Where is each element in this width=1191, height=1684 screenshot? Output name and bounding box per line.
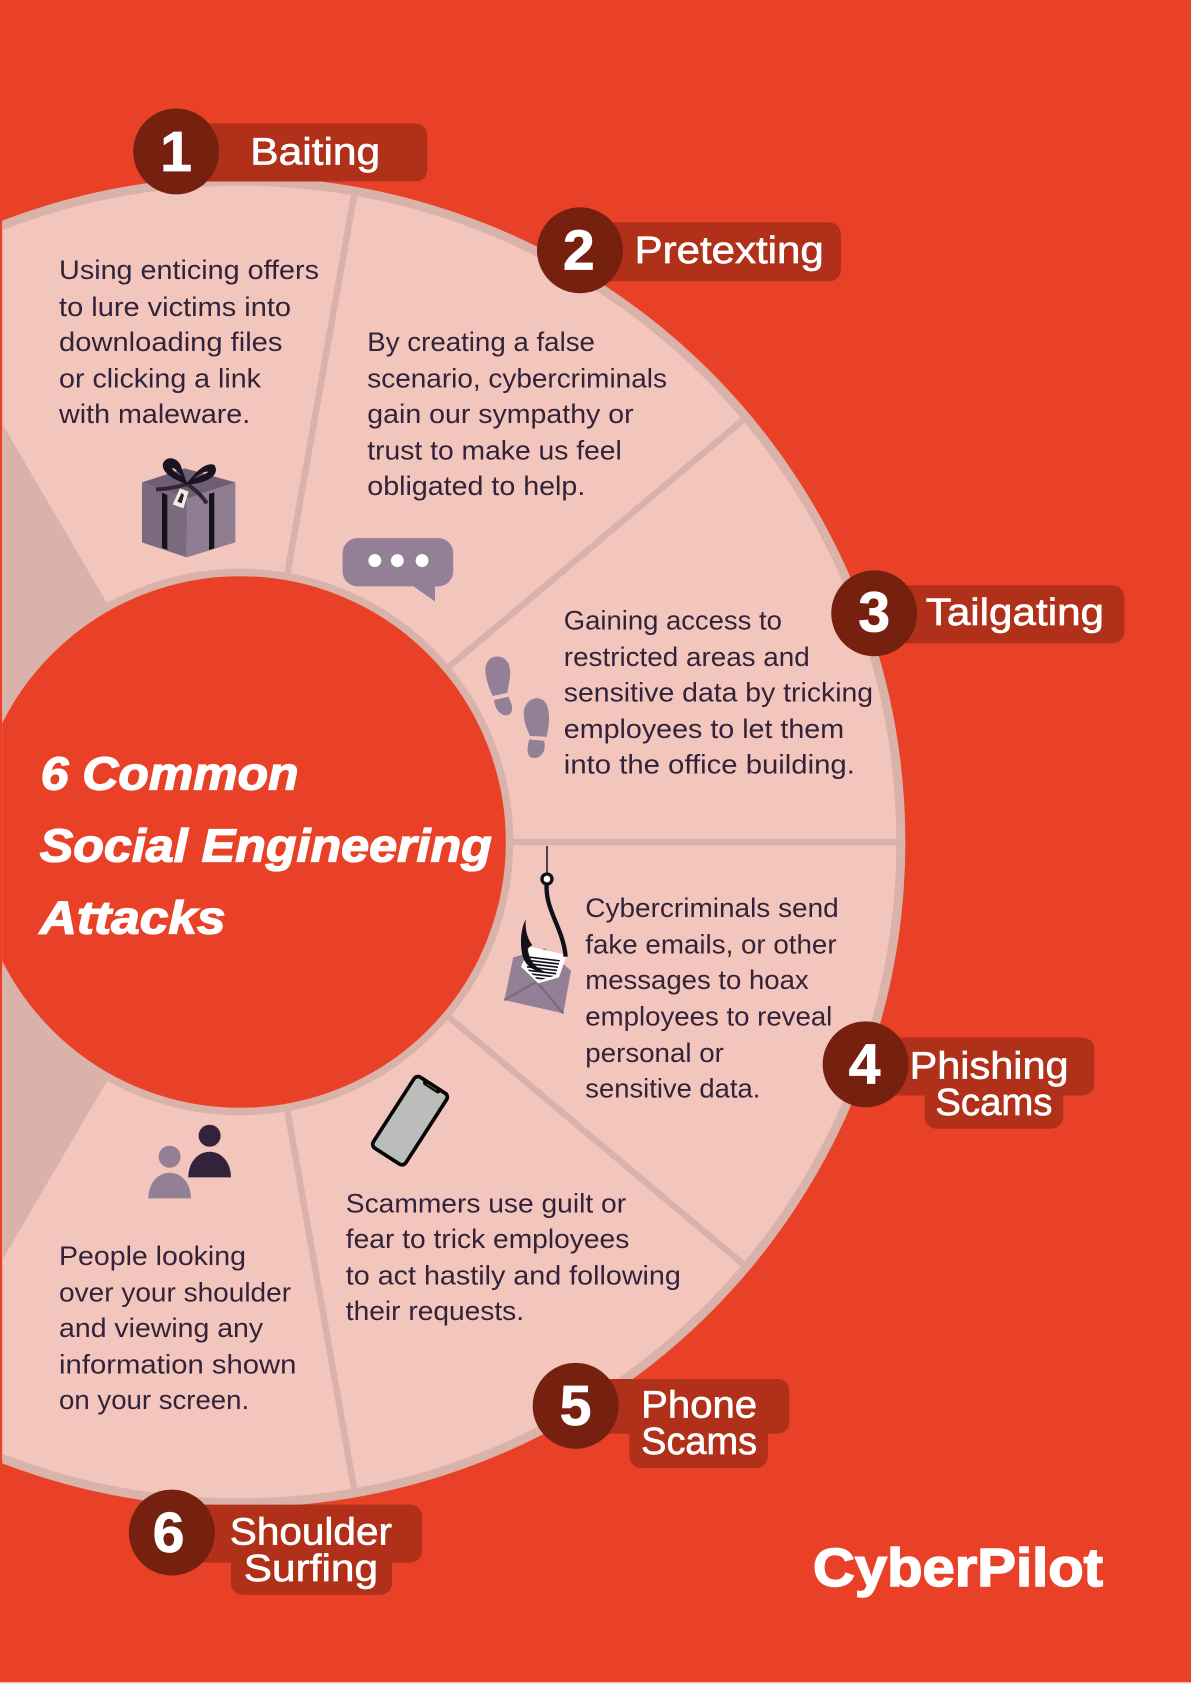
- text: pretexting description: trust to make us feel: [367, 436, 622, 466]
- text: baiting description: with maleware.: [58, 399, 250, 429]
- label 6: Shoulder Surfing: [129, 1490, 422, 1595]
- label 4: Phishing Scams: Scams: [935, 1081, 1052, 1123]
- text: shoulder surfing description: on your screen.: [59, 1385, 249, 1415]
- text: shoulder surfing description: [59, 1241, 296, 1415]
- text: phishing description: sensitive data.: [585, 1074, 760, 1104]
- text: shoulder surfing description: and viewing any: [59, 1313, 264, 1343]
- text: phone scams description: [346, 1189, 681, 1326]
- text: phishing description: Cybercriminals send: [585, 893, 839, 923]
- text: phishing description: messages to hoax: [585, 965, 809, 995]
- text: phishing description: fake emails, or other: [585, 930, 837, 960]
- text: pretexting description: gain our sympathy or: [367, 399, 634, 429]
- wheel with six segments: [0, 181, 901, 1503]
- label 3: Tailgating: [831, 570, 1124, 656]
- title: 6 Common: [41, 747, 299, 799]
- text: baiting description: downloading files: [59, 327, 282, 357]
- label 1: Baiting: 1: [160, 120, 192, 184]
- label 1: Baiting: Baiting: [250, 130, 380, 172]
- label 1: Baiting: [133, 108, 427, 194]
- icon: footprints: [485, 656, 549, 758]
- label 5: Phone Scams: [533, 1363, 789, 1468]
- label 4: Phishing Scams: [823, 1021, 1094, 1129]
- label 2: Pretexting: 2: [563, 219, 595, 283]
- icon: phishing hook and envelope: [504, 846, 571, 1013]
- label 5: Phone Scams: 5: [560, 1374, 591, 1438]
- text: phishing description: [585, 893, 839, 1104]
- label 2: Pretexting: Pretexting: [635, 229, 824, 271]
- title: [39, 747, 492, 943]
- label 3: Tailgating: 3: [858, 581, 890, 645]
- title: Social Engineering: [40, 819, 492, 871]
- text: tailgating description: restricted areas and: [564, 642, 810, 672]
- text: tailgating description: Gaining access to: [564, 605, 782, 635]
- text: phishing description: personal or: [585, 1038, 724, 1068]
- text: pretexting description: [367, 327, 667, 501]
- label 2: Pretexting: [537, 207, 841, 293]
- text: baiting description: Using enticing offers: [59, 255, 319, 285]
- label 6: Shoulder Surfing: Shoulder: [230, 1510, 392, 1552]
- text: baiting description: to lure victims into: [59, 292, 291, 322]
- text: pretexting description: obligated to help.: [367, 471, 585, 501]
- label 4: Phishing Scams: 4: [849, 1033, 881, 1097]
- label 6: Shoulder Surfing: 6: [153, 1501, 184, 1565]
- icon: gift box: [142, 459, 235, 557]
- icon: smartphone: [371, 1075, 449, 1167]
- text: pretexting description: scenario, cybercriminals: [367, 364, 667, 394]
- text: phone scams description: their requests.: [346, 1296, 524, 1326]
- label 6: Shoulder Surfing: Surfing: [244, 1547, 378, 1589]
- text: baiting description: or clicking a link: [59, 364, 262, 394]
- text: tailgating description: employees to let them: [564, 714, 844, 744]
- text: tailgating description: [564, 605, 873, 779]
- text: phone scams description: to act hastily and following: [346, 1260, 681, 1290]
- text: phishing description: employees to reveal: [585, 1002, 832, 1032]
- text: shoulder surfing description: People looking: [59, 1241, 246, 1271]
- text: shoulder surfing description: information shown: [59, 1350, 296, 1380]
- text: tailgating description: sensitive data by tricking: [564, 677, 873, 707]
- label 5: Phone Scams: Phone: [641, 1384, 757, 1426]
- text: phone scams description: Scammers use guilt or: [346, 1189, 626, 1219]
- text: tailgating description: into the office building.: [564, 749, 855, 779]
- text: pretexting description: By creating a false: [367, 327, 595, 357]
- label 5: Phone Scams: Scams: [641, 1420, 757, 1462]
- text: baiting description: [58, 255, 319, 429]
- label 4: Phishing Scams: Phishing: [910, 1044, 1069, 1086]
- title: Attacks: [39, 891, 226, 943]
- text: shoulder surfing description: over your shoulder: [59, 1278, 291, 1308]
- logo: CyberPilot: CyberPilot: [813, 1538, 1103, 1598]
- label 3: Tailgating: Tailgating: [926, 591, 1104, 633]
- icon: speech bubble: [343, 538, 453, 601]
- icon: two people: [148, 1125, 231, 1198]
- text: phone scams description: fear to trick employees: [346, 1224, 629, 1254]
